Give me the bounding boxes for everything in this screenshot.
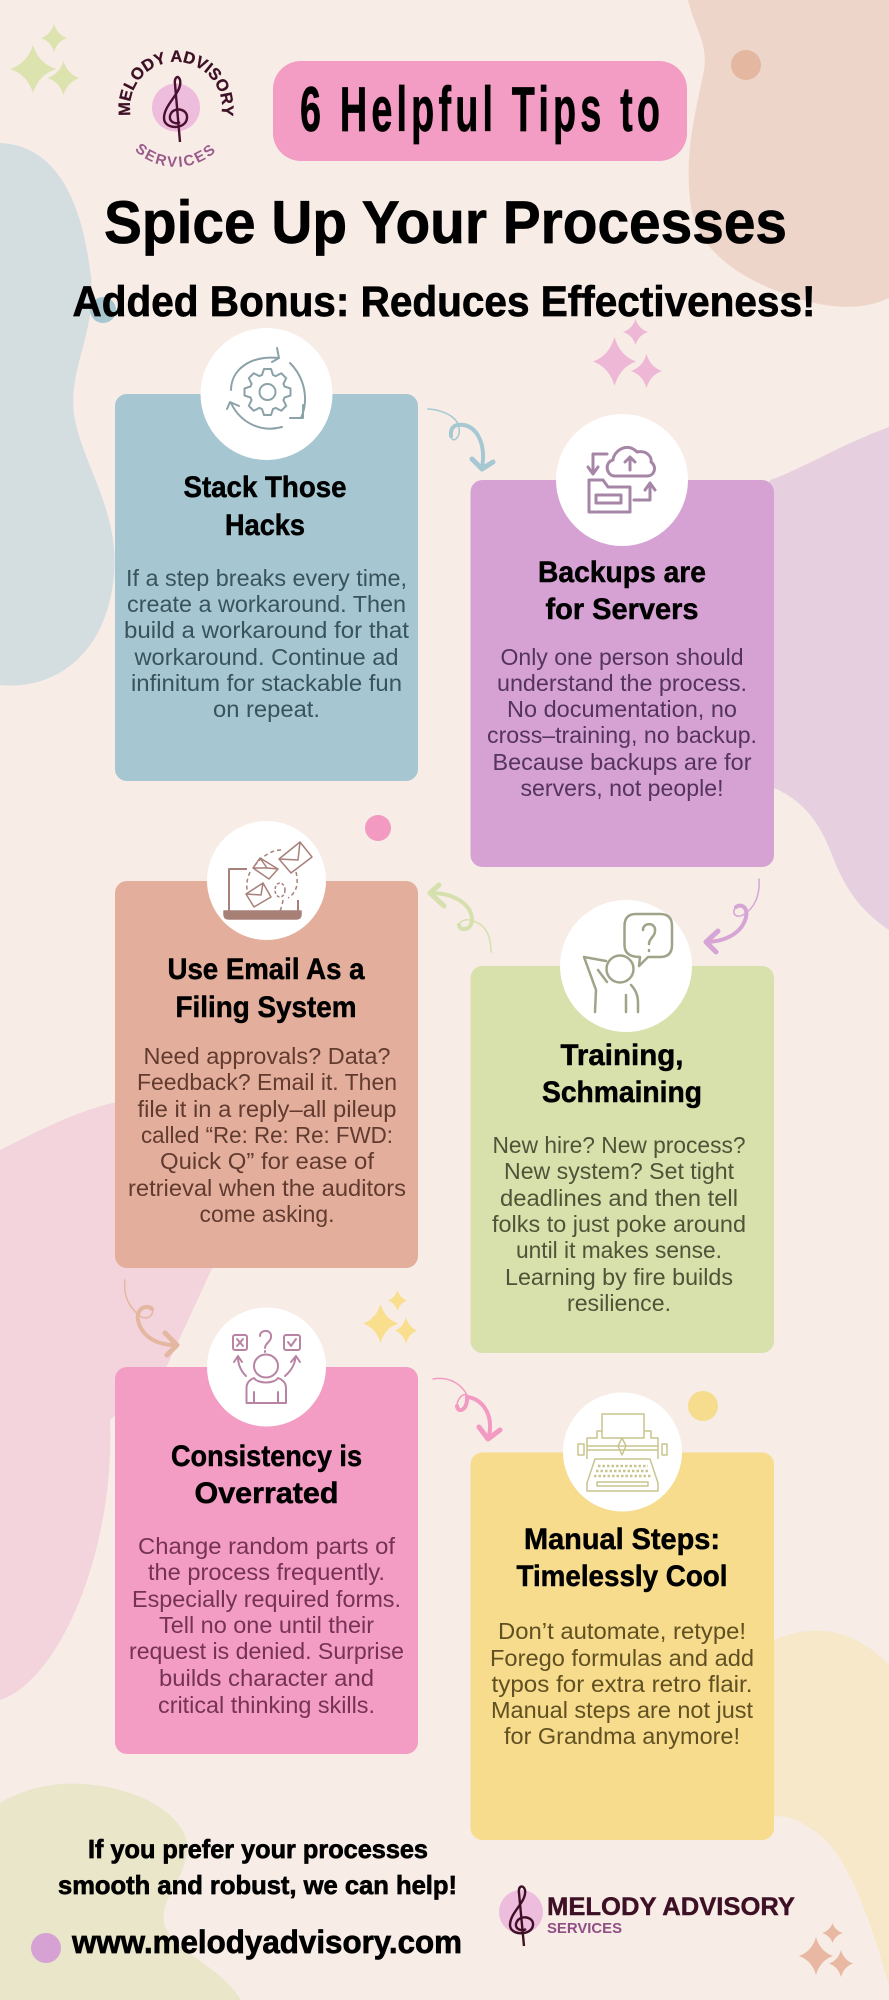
body text: Quick Q” for ease of — [160, 1148, 375, 1174]
dot: pink — [365, 815, 391, 841]
body text: called “Re: Re: Re: FWD: — [141, 1122, 393, 1148]
heading: Timelessly Cool — [516, 1560, 728, 1593]
body text: file it in a reply–all pileup — [138, 1096, 396, 1122]
arrow: blue, card 1 to card 2 — [428, 409, 493, 469]
body text: understand the process. — [497, 670, 747, 696]
heading: Use Email As a — [168, 953, 365, 986]
body text: Feedback? Email it. Then — [137, 1069, 397, 1095]
heading — [168, 953, 365, 1024]
dot: purple footer — [31, 1933, 61, 1963]
heading — [184, 471, 346, 542]
panel: manual steps timelessly cool — [470, 1392, 774, 1840]
icon: typewriter — [578, 1414, 667, 1491]
arrow: purple, card 2 to card 4 — [706, 879, 759, 952]
body text: for Grandma anymore! — [504, 1723, 740, 1749]
body text: the process frequently. — [148, 1559, 385, 1585]
icon: peach sparkles — [799, 1923, 853, 1977]
icon: green sparkles — [10, 24, 80, 95]
subtitle: Added Bonus: Reduces Effectiveness! — [72, 278, 816, 326]
body text — [487, 644, 757, 801]
heading — [516, 1523, 728, 1593]
logo: circular melody advisory badge: MELODY ADVISORY — [118, 50, 234, 116]
arrow: peach, card 3 to card 5 — [125, 1280, 177, 1355]
body text: critical thinking skills. — [158, 1692, 375, 1718]
body text: Learning by fire builds — [505, 1264, 733, 1290]
body text: Especially required forms. — [132, 1586, 401, 1612]
body text: servers, not people! — [520, 775, 724, 801]
icon: pink sparkles — [593, 319, 662, 388]
panel: consistency is overrated — [115, 1308, 418, 1754]
body text: Forego formulas and add — [490, 1645, 754, 1671]
icon: gear with cycle arrows — [227, 348, 305, 429]
body text — [128, 1043, 406, 1227]
body text: New system? Set tight — [504, 1158, 735, 1184]
heading: Filing System — [176, 991, 356, 1024]
body text: cross–training, no backup. — [487, 722, 757, 748]
heading: Stack Those — [184, 471, 346, 504]
icon: person choosing between options — [233, 1331, 300, 1403]
heading — [171, 1440, 362, 1510]
dot: blue behind subtitle — [90, 297, 116, 323]
heading: Consistency is — [171, 1440, 362, 1473]
icon: person thinking with question bubble — [584, 914, 672, 1012]
logo: footer melody advisory services: MELODY ADVISORY — [547, 1893, 795, 1921]
heading — [542, 1039, 702, 1109]
body text: Because backups are for — [492, 749, 752, 775]
dot: yellow — [688, 1391, 718, 1421]
background blob: peach top right — [688, 0, 889, 307]
arrow: pink, card 5 to card 6 — [433, 1378, 500, 1439]
logo: circular melody advisory badge — [118, 50, 234, 167]
heading: Hacks — [225, 509, 305, 542]
body text: until it makes sense. — [516, 1237, 722, 1263]
heading: Backups are — [538, 556, 706, 589]
body text — [124, 565, 410, 722]
call to action text — [58, 1834, 457, 1900]
body text: If a step breaks every time, — [126, 565, 407, 591]
body text: folks to just poke around — [492, 1211, 746, 1237]
body text — [492, 1132, 746, 1316]
background blob: blue left — [0, 143, 115, 686]
body text: build a workaround for that — [124, 617, 410, 643]
title pill: 6 Helpful Tips to — [300, 75, 660, 146]
arrow: green, card 4 to card 3 — [430, 885, 491, 952]
body text: create a workaround. Then — [127, 591, 406, 617]
body text: builds character and — [159, 1665, 374, 1691]
body text: No documentation, no — [507, 696, 737, 722]
icon: yellow sparkles — [363, 1290, 417, 1344]
heading: Manual Steps: — [524, 1523, 720, 1556]
call to action text: smooth and robust, we can help! — [58, 1870, 457, 1900]
body text: deadlines and then tell — [500, 1185, 738, 1211]
background blob: purple right — [700, 427, 889, 930]
heading: Training, — [560, 1039, 684, 1072]
background blob: yellow bottom right — [774, 1631, 889, 1985]
body text: on repeat. — [213, 696, 320, 722]
body text: request is denied. Surprise — [129, 1638, 404, 1664]
body text — [129, 1533, 404, 1718]
body text: retrieval when the auditors — [128, 1175, 406, 1201]
heading: Schmaining — [542, 1076, 702, 1109]
background blob: pink left — [0, 1100, 215, 1700]
title pill — [273, 61, 687, 161]
body text: Manual steps are not just — [491, 1697, 754, 1723]
logo: footer melody advisory services: SERVICES — [547, 1920, 622, 1937]
title: Spice Up Your Processes — [104, 189, 787, 256]
body text: resilience. — [567, 1290, 671, 1316]
website url: www.melodyadvisory.com — [71, 1924, 462, 1960]
background blob: green bottom left — [0, 1784, 241, 2000]
icon: cloud and folder sync — [588, 447, 655, 512]
panel: use email as a filing system — [115, 821, 418, 1268]
body text: typos for extra retro flair. — [492, 1671, 752, 1697]
dot: peach top right — [731, 50, 761, 80]
body text: workaround. Continue ad — [133, 644, 398, 670]
heading: Overrated — [194, 1477, 338, 1510]
panel: training, schmaining — [470, 900, 774, 1353]
body text: Need approvals? Data? — [144, 1043, 390, 1069]
body text: Change random parts of — [138, 1533, 396, 1559]
logo: circular melody advisory badge: SERVICES — [136, 144, 214, 167]
logo: footer melody advisory services — [499, 1886, 795, 1946]
body text: Don’t automate, retype! — [498, 1618, 746, 1644]
body text: Tell no one until their — [159, 1612, 374, 1638]
icon: laptop with envelopes — [224, 842, 312, 919]
body text: Only one person should — [500, 644, 744, 670]
call to action text: If you prefer your processes — [88, 1834, 428, 1864]
heading — [538, 556, 706, 626]
body text: New hire? New process? — [492, 1132, 746, 1158]
body text: infinitum for stackable fun — [131, 670, 402, 696]
body text: come asking. — [200, 1201, 334, 1227]
body text — [490, 1618, 754, 1749]
panel: stack those hacks — [115, 328, 418, 781]
panel: backups are for servers — [470, 414, 774, 867]
heading: for Servers — [546, 593, 698, 626]
